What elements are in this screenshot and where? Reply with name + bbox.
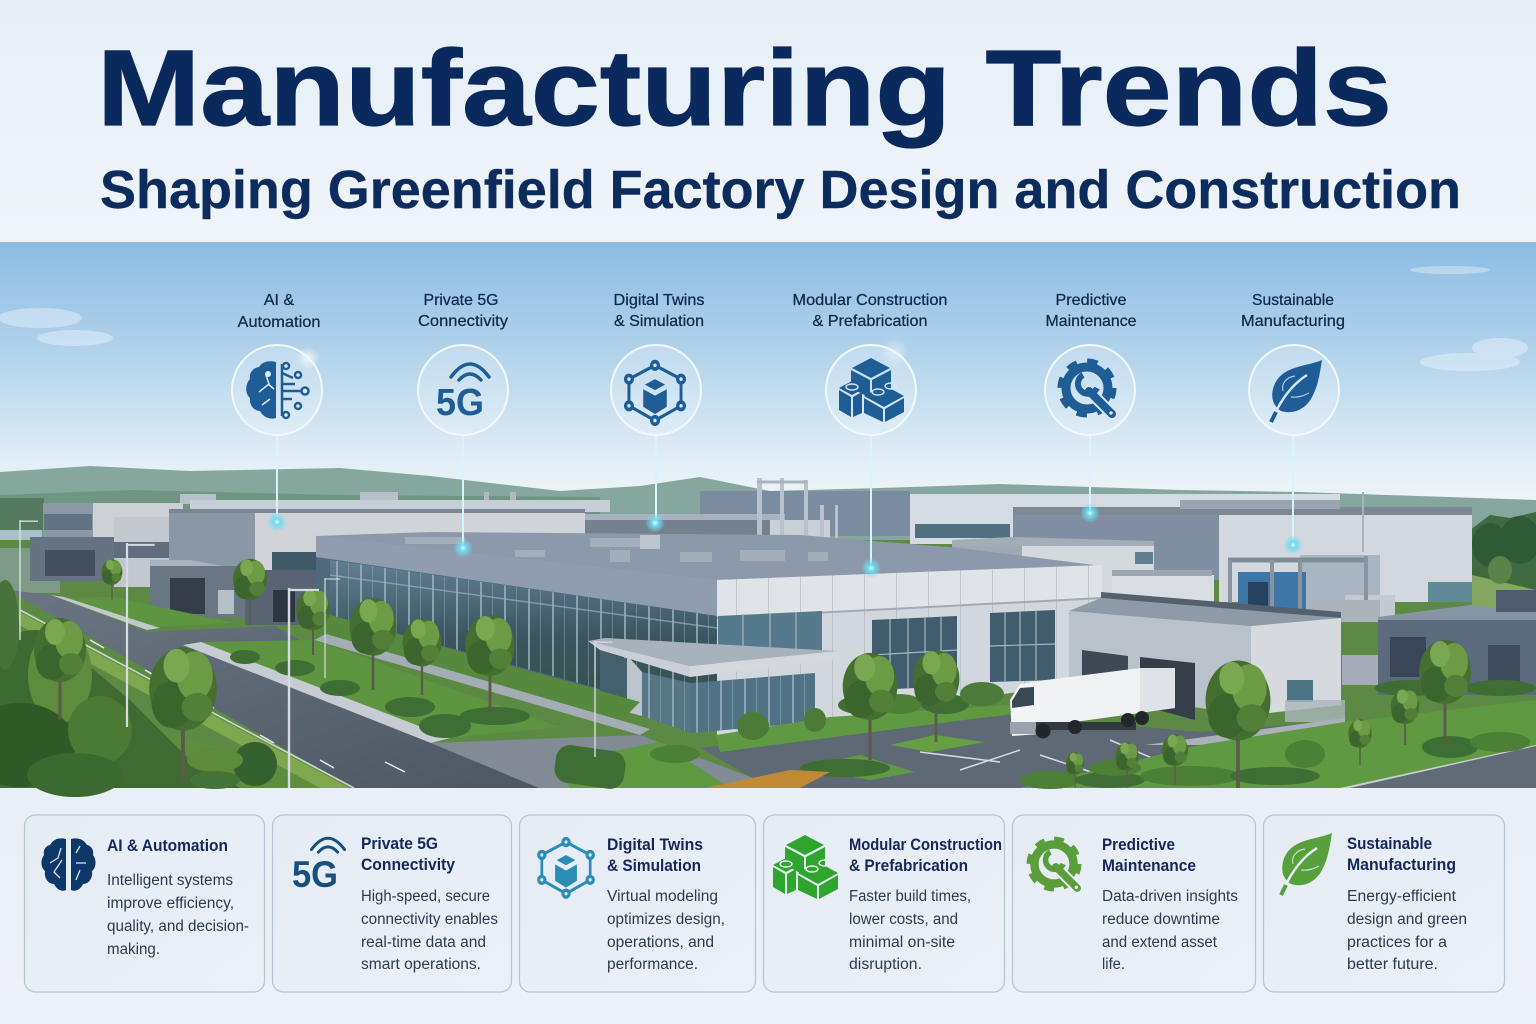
label: Sustainable [1252, 292, 1334, 309]
heading: Sustainable [1347, 834, 1432, 853]
icon: leaf [1281, 833, 1332, 895]
description: High-speed, secure [361, 888, 490, 905]
description: optimizes design, [607, 911, 725, 928]
roads [8, 590, 1536, 788]
description [361, 888, 498, 973]
description: and extend asset [1102, 934, 1218, 951]
subtitle: Shaping Greenfield Factory Design and Construction [100, 160, 1461, 220]
description: reduce downtime [1102, 911, 1220, 928]
mid building [952, 537, 1214, 611]
marker [267, 512, 287, 532]
heading: & Simulation [607, 856, 701, 875]
heading [607, 835, 703, 875]
heading [1102, 835, 1196, 875]
heading: & Prefabrication [849, 856, 968, 875]
right dark building [1342, 590, 1536, 695]
icon: gear and wrench [1029, 839, 1079, 889]
description: Virtual modeling [607, 888, 718, 905]
far centre building [180, 478, 1340, 546]
heading: AI & Automation [107, 836, 228, 855]
heading: Digital Twins [607, 835, 703, 854]
icon circle [418, 345, 508, 435]
callout: Private 5G [418, 292, 508, 558]
icon: digital twin cube [539, 839, 593, 897]
icon: brain [41, 838, 96, 891]
icon circle [232, 345, 322, 435]
main building roof [316, 532, 1102, 583]
icon: 5G [292, 838, 345, 895]
panel: Predictive Maintenance [1012, 815, 1256, 992]
left forest [0, 580, 277, 797]
icon: digital twin cube [626, 362, 684, 424]
callout: Sustainable Manufacturing [1241, 292, 1345, 555]
description: connectivity enables [361, 911, 498, 928]
label: Digital Twins [614, 292, 704, 309]
description: practices for a [1347, 934, 1447, 951]
right building [1013, 492, 1472, 622]
label: Maintenance [1046, 313, 1137, 330]
label: & Prefabrication [812, 313, 928, 330]
label [1046, 292, 1137, 330]
panel: Modular Construction [764, 815, 1004, 992]
label [614, 292, 704, 330]
icon: 5G: 5G [292, 854, 338, 895]
callout: AI & Automation [232, 292, 322, 532]
description: Intelligent systems [107, 872, 233, 889]
description: real-time data and [361, 934, 486, 951]
icon: modular blocks [773, 835, 838, 899]
marker [453, 538, 473, 558]
marker [1080, 503, 1100, 523]
hero factory illustration [0, 242, 1536, 797]
distant trees [0, 498, 44, 530]
callout: Predictive Maintenance [1045, 292, 1137, 523]
callout: Digital Twins [611, 292, 704, 533]
icon circle [1249, 345, 1339, 435]
description [849, 888, 971, 973]
description: performance. [607, 956, 698, 973]
left building B [114, 509, 585, 625]
panel: Private 5G [272, 815, 512, 992]
label [1241, 292, 1345, 330]
heading: Manufacturing [1347, 855, 1456, 874]
roof equipment [405, 535, 828, 562]
panel: Sustainable Manufacturing [1264, 815, 1504, 992]
main building right facade [717, 565, 1102, 735]
icon: 5G [436, 364, 489, 424]
truck [1010, 668, 1175, 738]
description: life. [1102, 956, 1125, 973]
trees [34, 559, 1471, 788]
orange flower bed [705, 770, 830, 788]
marker [1283, 535, 1303, 555]
description: smart operations. [361, 956, 481, 973]
entrance [588, 638, 838, 733]
heading: Connectivity [361, 855, 455, 874]
marker [645, 513, 665, 533]
description: Data-driven insights [1102, 888, 1238, 905]
icon: modular blocks [839, 358, 904, 422]
description: design and green [1347, 911, 1467, 928]
clouds [0, 266, 1528, 371]
description [1102, 888, 1238, 973]
sky glints [296, 338, 909, 370]
icon circle [826, 345, 916, 435]
label: Manufacturing [1241, 313, 1345, 330]
street lights [19, 520, 612, 788]
landscaped medians [0, 595, 1536, 788]
loading dock [1069, 592, 1345, 722]
panel: AI & Automation [24, 815, 264, 992]
description [607, 888, 725, 973]
icon circle [611, 345, 701, 435]
left building A [30, 503, 183, 581]
connector [870, 435, 872, 568]
canopy wing [150, 560, 245, 618]
icon: leaf [1271, 360, 1322, 422]
description: lower costs, and [849, 911, 958, 928]
description: disruption. [849, 956, 922, 973]
callout: Modular Construction [792, 292, 948, 578]
marker [861, 558, 881, 578]
heading: Modular Construction [849, 835, 1002, 854]
panel: Digital Twins [520, 815, 756, 992]
heading: Private 5G [361, 834, 438, 853]
description: making. [107, 941, 160, 958]
description [107, 872, 249, 958]
icon: brain [246, 361, 308, 419]
icon circle [1045, 345, 1135, 435]
title: Manufacturing Trends [97, 27, 1392, 148]
sky [0, 242, 1536, 500]
heading: Predictive [1102, 835, 1175, 854]
heading [1347, 834, 1456, 874]
description: better future. [1347, 956, 1438, 973]
label: & Simulation [614, 313, 704, 330]
hills [0, 466, 1536, 540]
label: Modular Construction [792, 292, 948, 309]
description: improve efficiency, [107, 895, 234, 912]
connector [655, 435, 657, 523]
label [792, 292, 948, 330]
heading: Maintenance [1102, 856, 1196, 875]
label: Private 5G [424, 292, 498, 309]
description [1347, 888, 1467, 973]
connector [462, 435, 464, 548]
label [238, 292, 320, 331]
icon: gear and wrench [1060, 361, 1114, 415]
description: Faster build times, [849, 888, 971, 905]
description: operations, and [607, 934, 714, 951]
label: Automation [238, 314, 320, 331]
connector [1292, 435, 1294, 545]
label: Connectivity [418, 313, 508, 330]
heading [361, 834, 455, 874]
connector [276, 435, 278, 522]
main building long facade [316, 536, 717, 720]
description: minimal on-site [849, 934, 955, 951]
header background [0, 0, 1536, 242]
far right forest [1470, 512, 1536, 600]
hedges [230, 650, 1536, 791]
label: AI & [264, 292, 294, 309]
label: Predictive [1056, 292, 1127, 309]
description: Energy-efficient [1347, 888, 1457, 905]
ground [0, 540, 1536, 788]
icon: 5G: 5G [436, 382, 484, 424]
connector [1089, 435, 1091, 513]
description: quality, and decision- [107, 918, 249, 935]
heading [849, 835, 1002, 875]
label [418, 292, 508, 330]
